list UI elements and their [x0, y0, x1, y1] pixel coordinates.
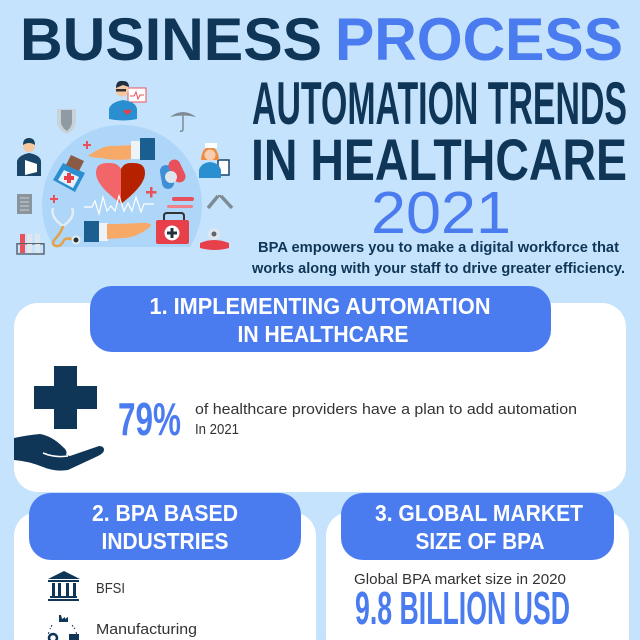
- stat description: of healthcare providers have a plan to add automation: [195, 401, 577, 418]
- icon: patient with bandage: [17, 138, 41, 176]
- heading 2: INDUSTRIES: [102, 528, 228, 554]
- icon: stethoscope: [52, 208, 80, 246]
- title: Business Process: [20, 6, 623, 73]
- heading 2: 2. BPA BASED: [92, 500, 238, 526]
- icon: manufacturing: [48, 615, 79, 640]
- intro text: BPA empowers you to make a digital workforce that: [258, 240, 619, 256]
- label BFSI: BFSI: [96, 580, 125, 597]
- intro text: [251, 240, 625, 277]
- heading 2: [29, 493, 301, 560]
- icon: heartbeat line: [84, 196, 154, 214]
- icon: first aid kit: [156, 213, 189, 244]
- icon: pills: [159, 158, 188, 190]
- icon: head mirror: [200, 228, 229, 250]
- icon: heart: [96, 163, 145, 204]
- market size caption: Global BPA market size in 2020: [354, 571, 566, 588]
- stat 79%: 79%: [118, 393, 181, 445]
- icon: doctor with monitor: [109, 81, 146, 120]
- icon: bank: [48, 571, 80, 601]
- stat description: In 2021: [195, 421, 239, 438]
- intro text: works along with your staff to drive greater efficiency.: [251, 261, 625, 277]
- title: Business Process: BUSINESS: [20, 6, 322, 73]
- heading 1: IN HEALTHCARE: [238, 321, 408, 347]
- icon: shield: [57, 109, 76, 134]
- icon: small plus marks: [50, 141, 156, 203]
- title: Business Process: PROCESS: [335, 6, 623, 73]
- icon: medicine bottle: [53, 155, 85, 192]
- heading 3: 3. GLOBAL MARKET: [375, 500, 583, 526]
- healthcare illustration: [17, 81, 232, 254]
- icon: clipboard list: [17, 194, 32, 214]
- year 2021: 2021: [371, 180, 511, 246]
- label Manufacturing: Manufacturing: [96, 621, 197, 638]
- icon: syringes: [167, 197, 194, 208]
- heading 3: [341, 493, 614, 560]
- heading 1: 1. IMPLEMENTING AUTOMATION: [150, 293, 490, 319]
- icon: hand holding medical cross: [14, 366, 104, 471]
- dome background: [42, 125, 202, 247]
- icon: nurse: [199, 143, 229, 178]
- heading 3: SIZE OF BPA: [416, 528, 544, 554]
- icon: upper hand: [88, 138, 155, 160]
- heading 1: [90, 286, 551, 352]
- stat description: [195, 401, 577, 438]
- icon: forceps: [208, 196, 232, 208]
- icon: lower hand: [84, 221, 151, 242]
- panel 3: global market size: [326, 493, 629, 640]
- icon: umbrella: [170, 112, 196, 131]
- icon: tubes: [17, 234, 44, 254]
- panel 1: implementing automation: [14, 286, 626, 492]
- panel 2: BPA based industries: [14, 493, 316, 640]
